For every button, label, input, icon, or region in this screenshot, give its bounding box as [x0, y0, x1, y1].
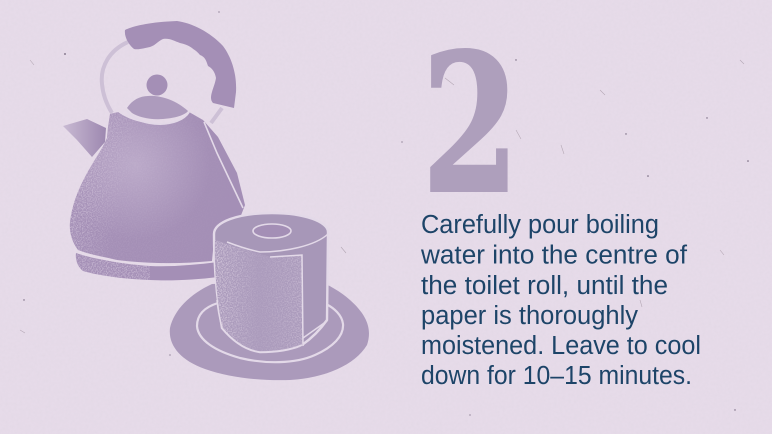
kettle knob: [146, 74, 168, 96]
illustration: kettle: [63, 21, 245, 280]
saucer inner rim: [197, 303, 343, 362]
instruction text: [420, 211, 701, 390]
kettle lid crescent line: [127, 111, 189, 124]
roll body: [214, 213, 328, 352]
kettle thin handle arms: [102, 42, 222, 123]
instruction text: water into the centre of: [420, 241, 688, 269]
kettle base grain: [76, 253, 150, 280]
roll flap: [215, 240, 303, 352]
roll outlines: [217, 234, 328, 352]
kettle handle grip: [125, 21, 236, 108]
kettle spout: [63, 119, 106, 157]
kettle body grain highlight: [70, 112, 240, 263]
step number: 2: [422, 12, 519, 236]
kettle back strip highlight line: [204, 122, 243, 208]
instruction text: down for 10–15 minutes.: [421, 362, 692, 390]
kettle lid: [127, 96, 188, 119]
illustration: saucer and toilet roll: [170, 213, 369, 380]
saucer: [170, 280, 369, 380]
instruction text: the toilet roll, until the: [421, 272, 668, 300]
roll flap grain: [215, 240, 303, 352]
roll centre hole: [253, 224, 291, 238]
kettle base: [76, 253, 218, 280]
kettle body: [70, 112, 245, 263]
kettle body soft glow: [70, 112, 225, 263]
instruction text: Carefully pour boiling: [421, 211, 659, 239]
instruction text: paper is thoroughly: [421, 302, 638, 330]
instruction text: moistened. Leave to cool: [421, 332, 701, 360]
